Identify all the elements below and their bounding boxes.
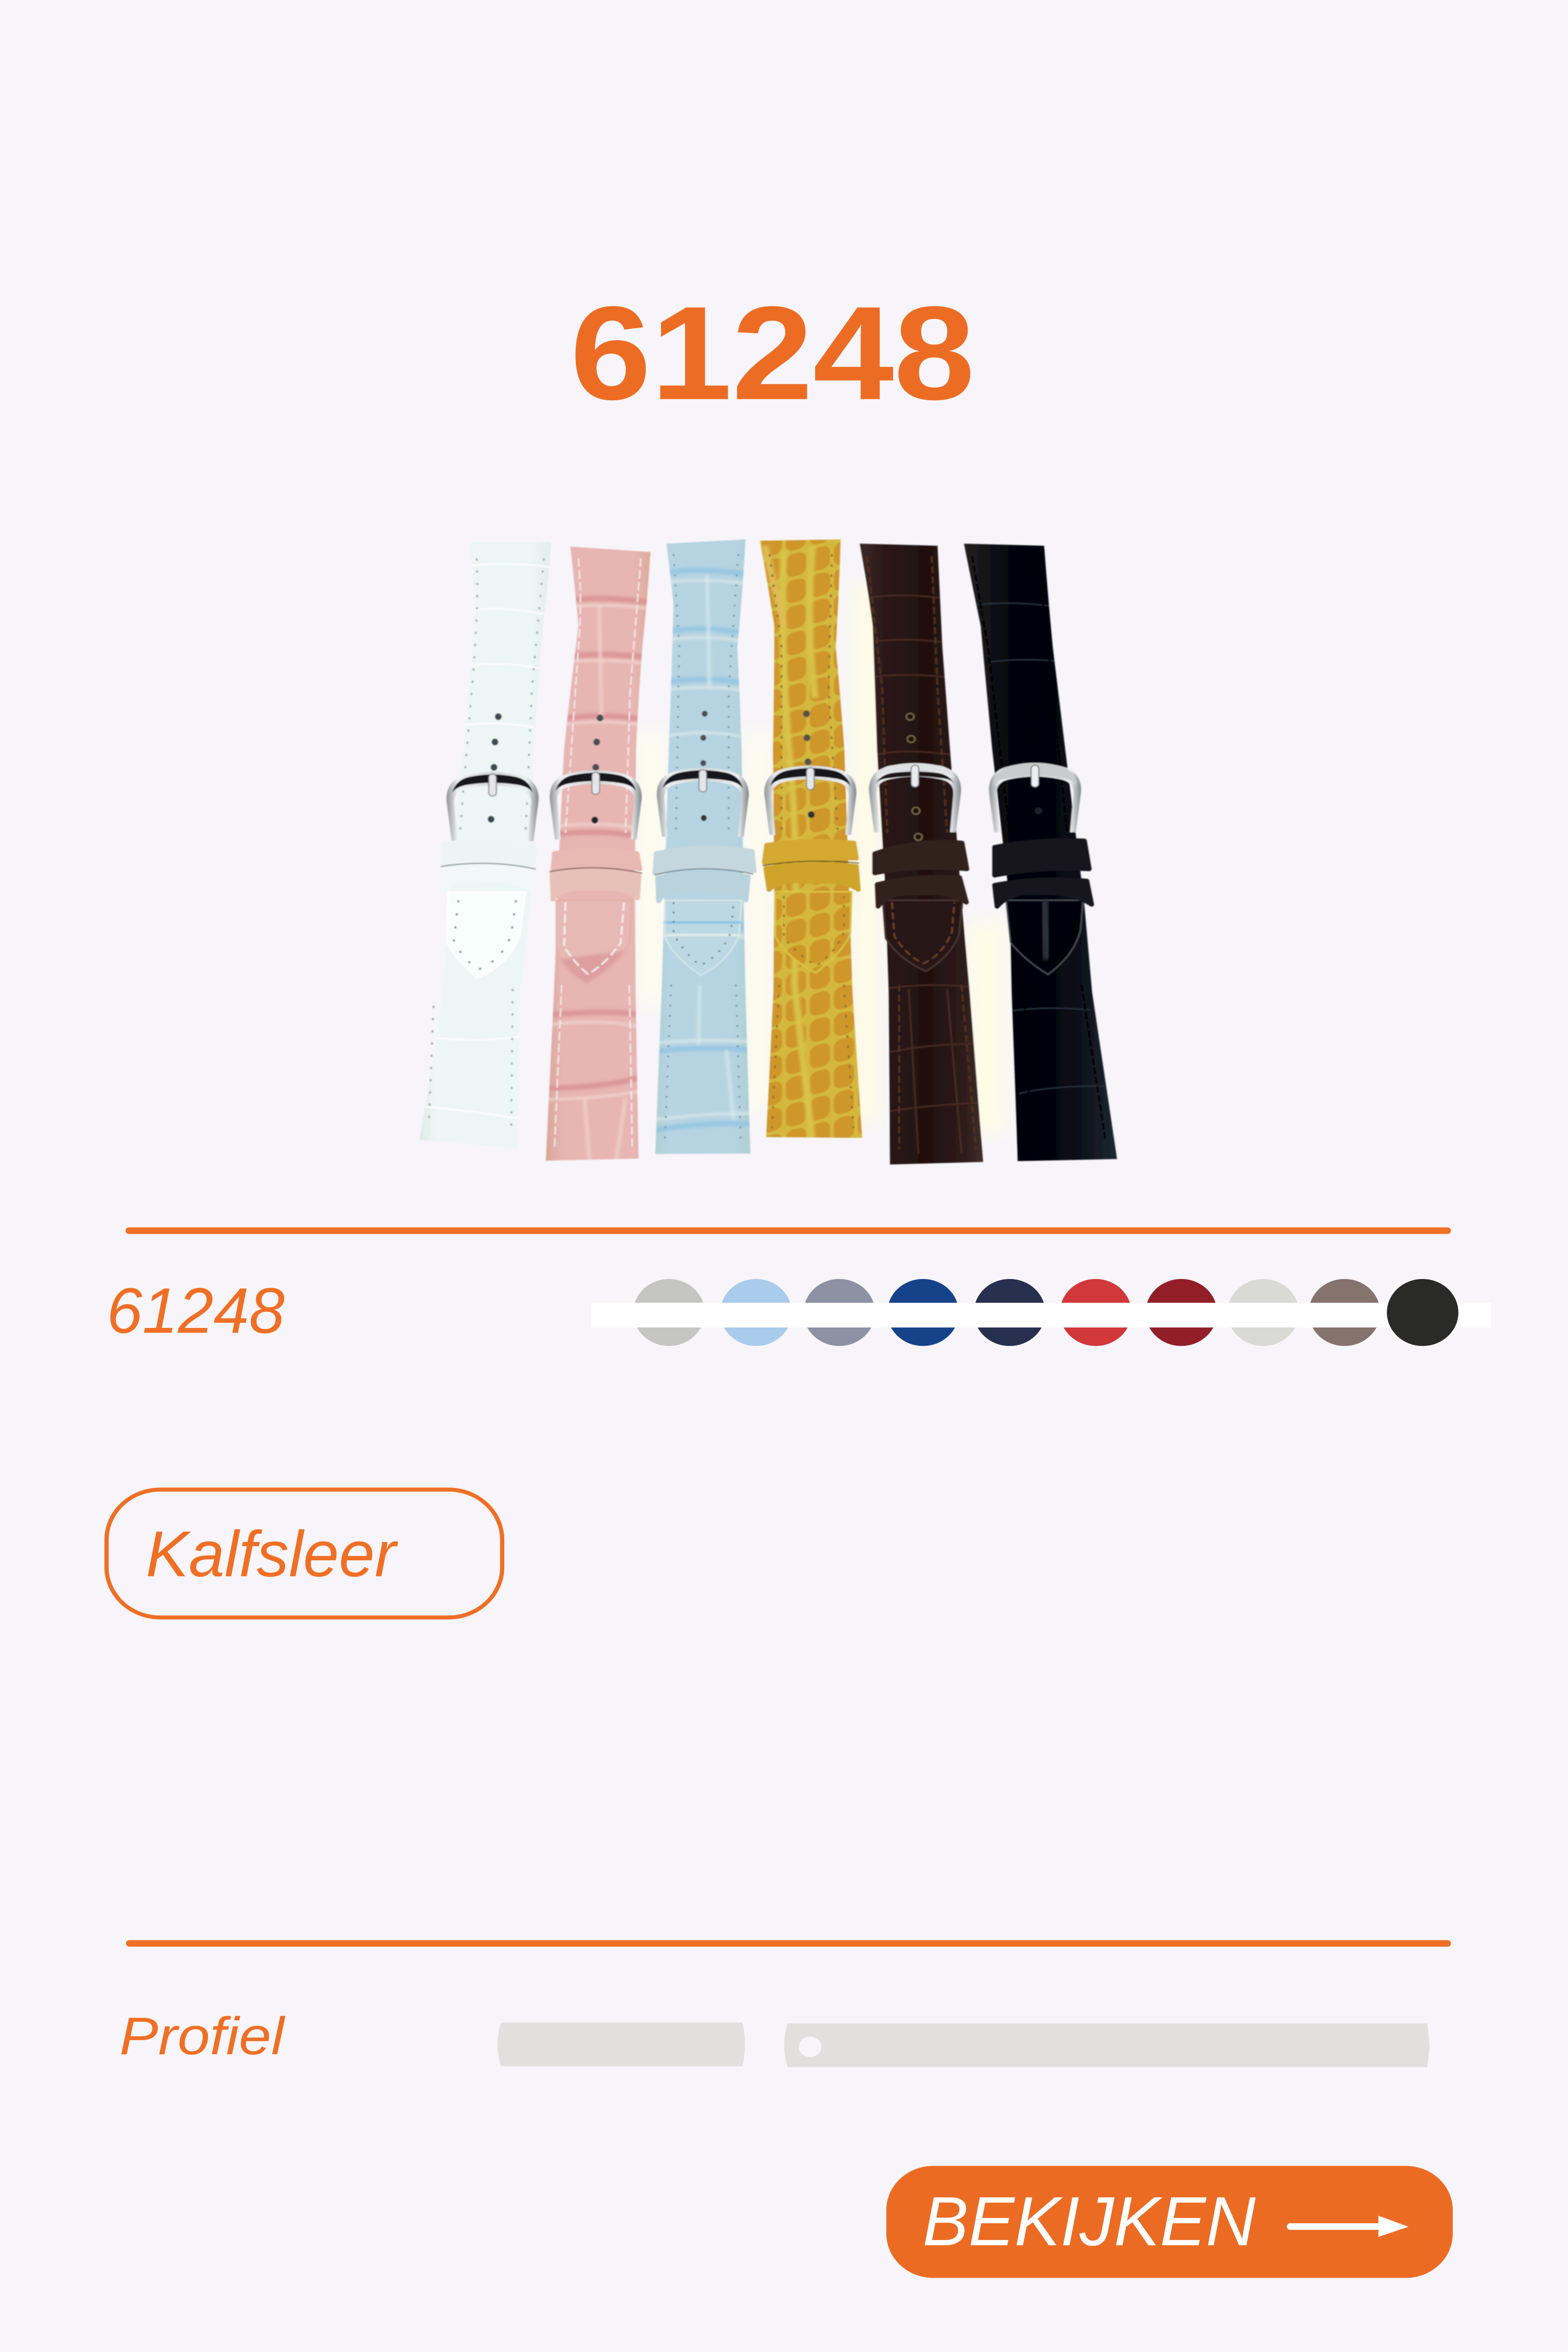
- pink keepers: [549, 849, 642, 899]
- strap: white: [419, 542, 554, 1148]
- blue keepers: [654, 848, 754, 901]
- title: model number: 61248: [570, 279, 975, 428]
- pink strap tip: [557, 900, 631, 983]
- short strap piece: [498, 2023, 745, 2066]
- black strap tip: [1006, 900, 1083, 975]
- long strap piece with hole: [784, 2024, 1430, 2067]
- button: BEKIJKEN: BEKIJKEN: [923, 2183, 1256, 2260]
- strap: pink: [544, 547, 654, 1162]
- white keepers: [441, 841, 536, 892]
- strap: dark brown: [860, 544, 983, 1165]
- black keepers: [995, 840, 1091, 906]
- strap: black: [964, 544, 1117, 1161]
- material tag: Kalfsleer: Kalfsleer: [146, 1518, 398, 1590]
- white strap tip: [447, 892, 525, 978]
- icon: arrow: [1287, 2216, 1409, 2237]
- brown keepers: [875, 842, 967, 906]
- yellow strap tip: [775, 892, 852, 973]
- yellow keepers: [762, 841, 860, 890]
- blue strap tip: [665, 900, 742, 976]
- model label: 61248: [107, 1274, 285, 1346]
- infographic canvas: [104, 306, 1491, 2278]
- profile label: Profiel: [119, 2007, 286, 2066]
- photo: six watch straps: [419, 540, 1117, 1165]
- strap: light blue: [654, 540, 754, 1154]
- colour swatches: [591, 1279, 1491, 1346]
- strap: mustard yellow: [760, 540, 862, 1145]
- brown strap tip: [883, 900, 963, 971]
- button: BEKIJKEN: [886, 2166, 1453, 2278]
- material tag: Kalfsleer: [106, 1490, 502, 1617]
- white band behind swatches: [591, 1279, 1491, 1346]
- profile diagram: strap silhouette: [498, 2023, 1430, 2067]
